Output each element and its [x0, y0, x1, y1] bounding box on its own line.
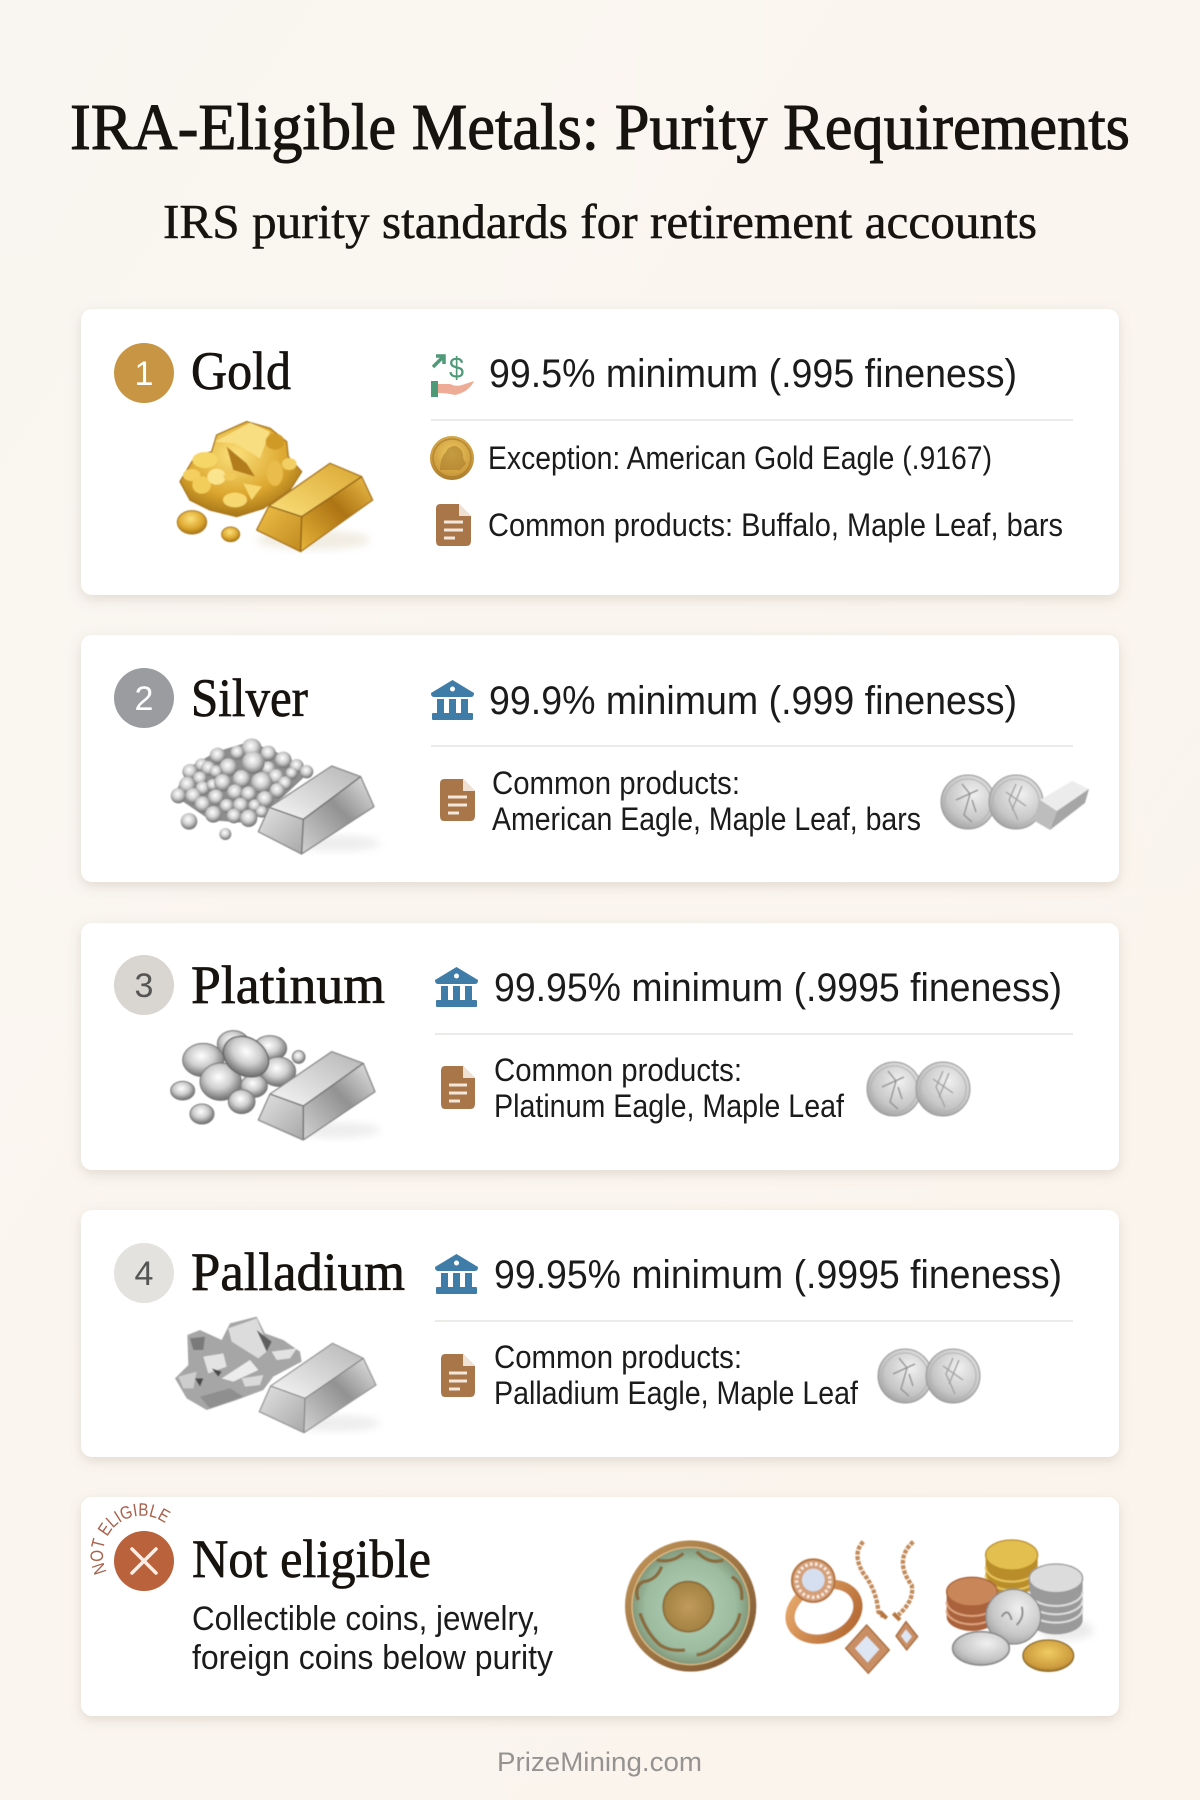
exception text: Exception: American Gold Eagle (.9167)	[488, 440, 992, 476]
icon: gold coin	[430, 436, 474, 480]
description: Collectible coins, jewelry,	[192, 1600, 540, 1638]
requirement text: 99.95% minimum (.9995 fineness)	[494, 966, 1062, 1010]
icon: document	[441, 1354, 475, 1397]
illustration: platinum nuggets and bar	[171, 1028, 380, 1140]
panel: silver	[81, 635, 1119, 882]
illustration: palladium ore and bar	[175, 1317, 380, 1433]
illustration: collectible coin	[625, 1540, 756, 1672]
title: IRA-Eligible Metals: Purity Requirements	[70, 91, 1130, 164]
number badge 3: 3	[135, 967, 153, 1005]
number badge 4: 4	[135, 1255, 153, 1293]
common products text: Common products:	[494, 1339, 742, 1375]
curved label: NOT ELIGIBLE	[90, 1503, 171, 1575]
number badge 1: 1	[135, 355, 153, 393]
icon: hand with dollar and arrow: $	[449, 352, 464, 385]
icon: document	[440, 779, 475, 821]
panel: palladium	[81, 1210, 1119, 1457]
heading: palladium: Palladium	[191, 1242, 405, 1302]
illustration: silver beads and bar	[171, 738, 380, 854]
number badge 2: 2	[135, 680, 153, 718]
icon: document	[441, 1066, 475, 1109]
illustration: palladium coins	[878, 1349, 980, 1403]
common products text: Common products: Buffalo, Maple Leaf, bars	[488, 507, 1063, 543]
panel: gold	[81, 309, 1119, 595]
heading: not eligible: Not eligible	[192, 1529, 431, 1589]
illustration: silver coins and small bar	[941, 775, 1089, 830]
number badge 2	[114, 668, 174, 728]
heading: gold: Gold	[191, 341, 291, 401]
footer: PrizeMining.com	[497, 1747, 702, 1777]
common products text: Common products:	[494, 1052, 742, 1088]
description: foreign coins below purity	[192, 1639, 553, 1677]
requirement text: 99.95% minimum (.9995 fineness)	[494, 1253, 1062, 1297]
requirement text: 99.9% minimum (.999 fineness)	[489, 679, 1017, 723]
icon: hand with dollar and arrow	[431, 352, 474, 397]
icon: bank	[431, 680, 474, 720]
icon: bank	[435, 1254, 478, 1294]
badge: not eligible cross	[114, 1531, 174, 1591]
common products text	[492, 765, 921, 837]
illustration: ring and necklace	[782, 1542, 918, 1673]
common products text	[494, 1339, 858, 1411]
illustration: gold nugget and bar	[177, 422, 373, 552]
panel: not eligible	[78, 1497, 1122, 1724]
number badge 1	[114, 343, 174, 403]
common products text: Palladium Eagle, Maple Leaf	[494, 1375, 858, 1411]
illustration: platinum coins	[867, 1062, 970, 1116]
number badge 4	[114, 1243, 174, 1303]
description	[192, 1600, 553, 1677]
common products text	[494, 1052, 844, 1124]
common products text: Platinum Eagle, Maple Leaf	[494, 1088, 844, 1124]
icon: document	[436, 504, 471, 546]
illustration: coin stacks	[947, 1540, 1093, 1671]
common products text: Common products:	[492, 765, 740, 801]
heading: silver: Silver	[191, 668, 308, 728]
subtitle: IRS purity standards for retirement accounts	[163, 194, 1037, 249]
icon: bank	[435, 967, 478, 1007]
heading: platinum: Platinum	[191, 955, 385, 1015]
number badge 3	[114, 955, 174, 1015]
panel: platinum	[81, 923, 1119, 1170]
common products text: American Eagle, Maple Leaf, bars	[492, 801, 921, 837]
requirement text: 99.5% minimum (.995 fineness)	[489, 352, 1017, 396]
